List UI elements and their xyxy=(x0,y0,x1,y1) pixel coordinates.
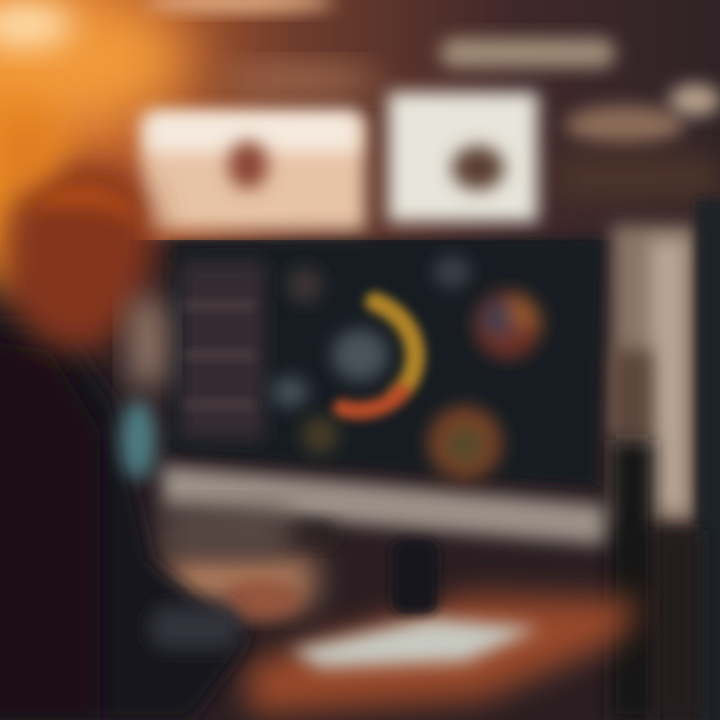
desk surface xyxy=(165,555,640,715)
person: orange neck glow xyxy=(0,120,50,180)
wall board: right xyxy=(388,92,538,222)
person: torso silhouette xyxy=(0,120,302,720)
pie chart: upper right xyxy=(474,291,542,359)
orange glow at left edge xyxy=(0,90,65,290)
right shelf column xyxy=(610,200,720,720)
paper on desk xyxy=(290,618,540,668)
pie chart: lower right xyxy=(428,406,502,480)
dark cup on desk xyxy=(392,540,438,614)
person: pale teal collar xyxy=(120,400,156,480)
text column on screen xyxy=(180,260,265,440)
monitor stand and lower bezel xyxy=(160,465,605,550)
scattered screen dots xyxy=(287,267,323,303)
person: orange head xyxy=(3,164,155,351)
monitor screen xyxy=(168,238,602,486)
wall board: left xyxy=(140,112,365,230)
donut chart: orange arc xyxy=(342,302,415,411)
person: hand on keyboard xyxy=(222,580,302,620)
